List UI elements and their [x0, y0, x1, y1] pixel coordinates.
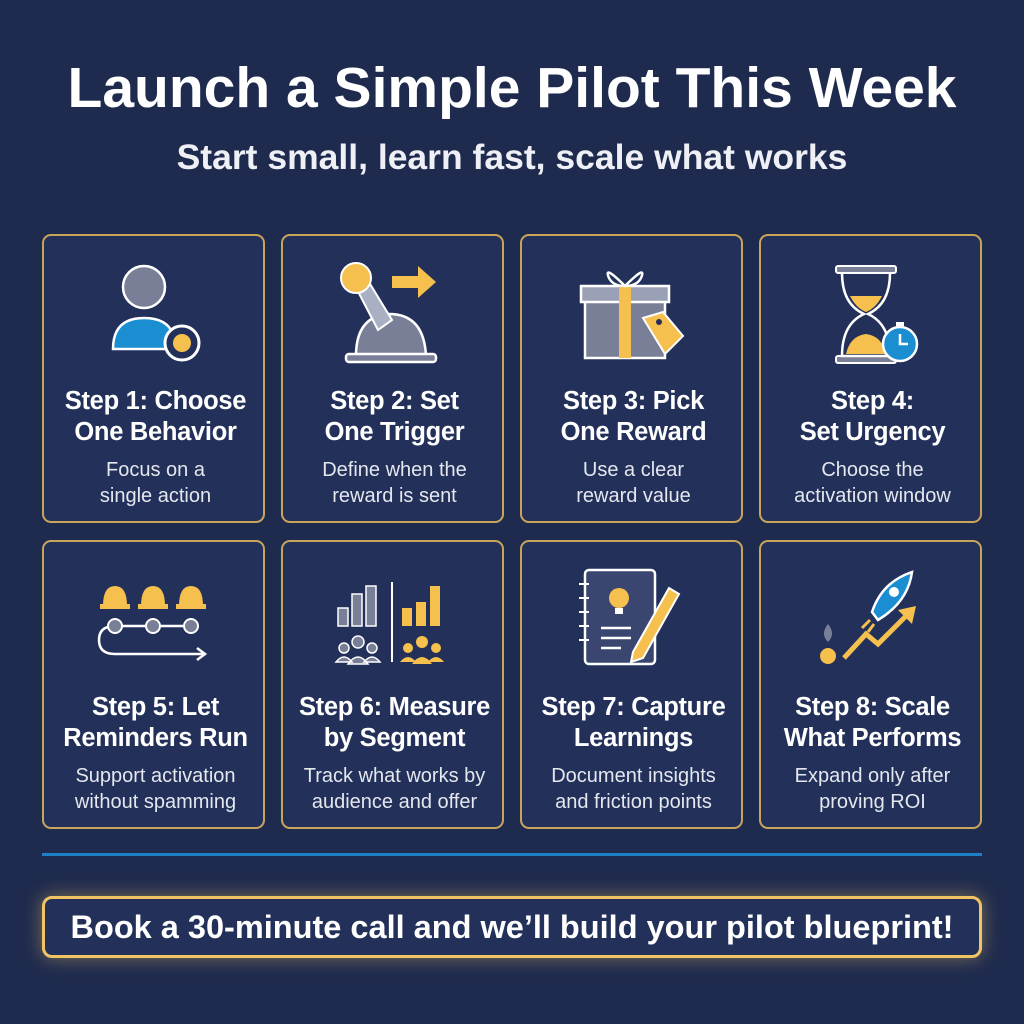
card: step 3: Use a clear	[583, 459, 684, 481]
card: step 2: Step 2: Set	[330, 387, 459, 415]
card: step 8	[759, 540, 982, 829]
card: step 5: Step 5: Let	[92, 693, 219, 721]
card: step 3: Step 3: Pick	[563, 387, 704, 415]
icon: gift with tag	[580, 271, 684, 360]
card: step 6: Track what works by	[304, 765, 485, 787]
card: step 1: Focus on a	[106, 459, 205, 481]
card: step 4: Choose the	[821, 459, 924, 481]
card: step 3: reward value	[576, 485, 691, 507]
card: step 5	[42, 540, 265, 829]
card: step 6: audience and offer	[312, 791, 477, 813]
title: Launch a Simple Pilot This Week	[68, 56, 956, 120]
card: step 2: Define when the	[322, 459, 467, 481]
card: step 4: Set Urgency	[800, 418, 945, 446]
card: step 4: Step 4:	[831, 387, 914, 415]
call to action: Book a 30-minute call and we’ll build your pilot blueprint!	[70, 909, 954, 945]
card: step 1: One Behavior	[74, 418, 237, 446]
card: step 5: Reminders Run	[63, 724, 248, 752]
call to action	[42, 896, 982, 958]
icon: bells timeline	[98, 586, 207, 661]
icon: lever trigger	[340, 262, 438, 364]
icon: person with target	[112, 264, 200, 362]
card: step 3: One Reward	[561, 418, 706, 446]
card: step 8: Step 8: Scale	[795, 693, 950, 721]
card: step 2	[281, 234, 504, 523]
card: step 7: and friction points	[555, 791, 712, 813]
subtitle: Start small, learn fast, scale what works	[177, 137, 847, 177]
card: step 7	[520, 540, 743, 829]
card: step 2: reward is sent	[332, 485, 457, 507]
card: step 4	[759, 234, 982, 523]
card: step 7: Step 7: Capture	[542, 693, 725, 721]
card: step 1: single action	[100, 485, 211, 507]
card: step 8: What Performs	[784, 724, 961, 752]
card: step 7: Document insights	[551, 765, 716, 787]
card: step 7: Learnings	[574, 724, 693, 752]
card: step 5: without spamming	[75, 791, 236, 813]
card: step 1: Step 1: Choose	[65, 387, 246, 415]
card: step 4: activation window	[794, 485, 951, 507]
card: step 1	[42, 234, 265, 523]
card: step 6: by Segment	[324, 724, 465, 752]
icon: rocket and growth arrow	[820, 570, 916, 664]
card: step 2: One Trigger	[325, 418, 464, 446]
card: step 6	[281, 540, 504, 829]
card: step 8: proving ROI	[819, 791, 926, 813]
card: step 6: Step 6: Measure	[299, 693, 490, 721]
icon: notebook with pencil	[579, 568, 680, 666]
card: step 3	[520, 234, 743, 523]
icon: segmented bar charts	[334, 582, 444, 665]
card: step 5: Support activation	[75, 765, 236, 787]
card: step 8: Expand only after	[795, 765, 950, 787]
icon: hourglass with stopwatch	[835, 265, 918, 364]
